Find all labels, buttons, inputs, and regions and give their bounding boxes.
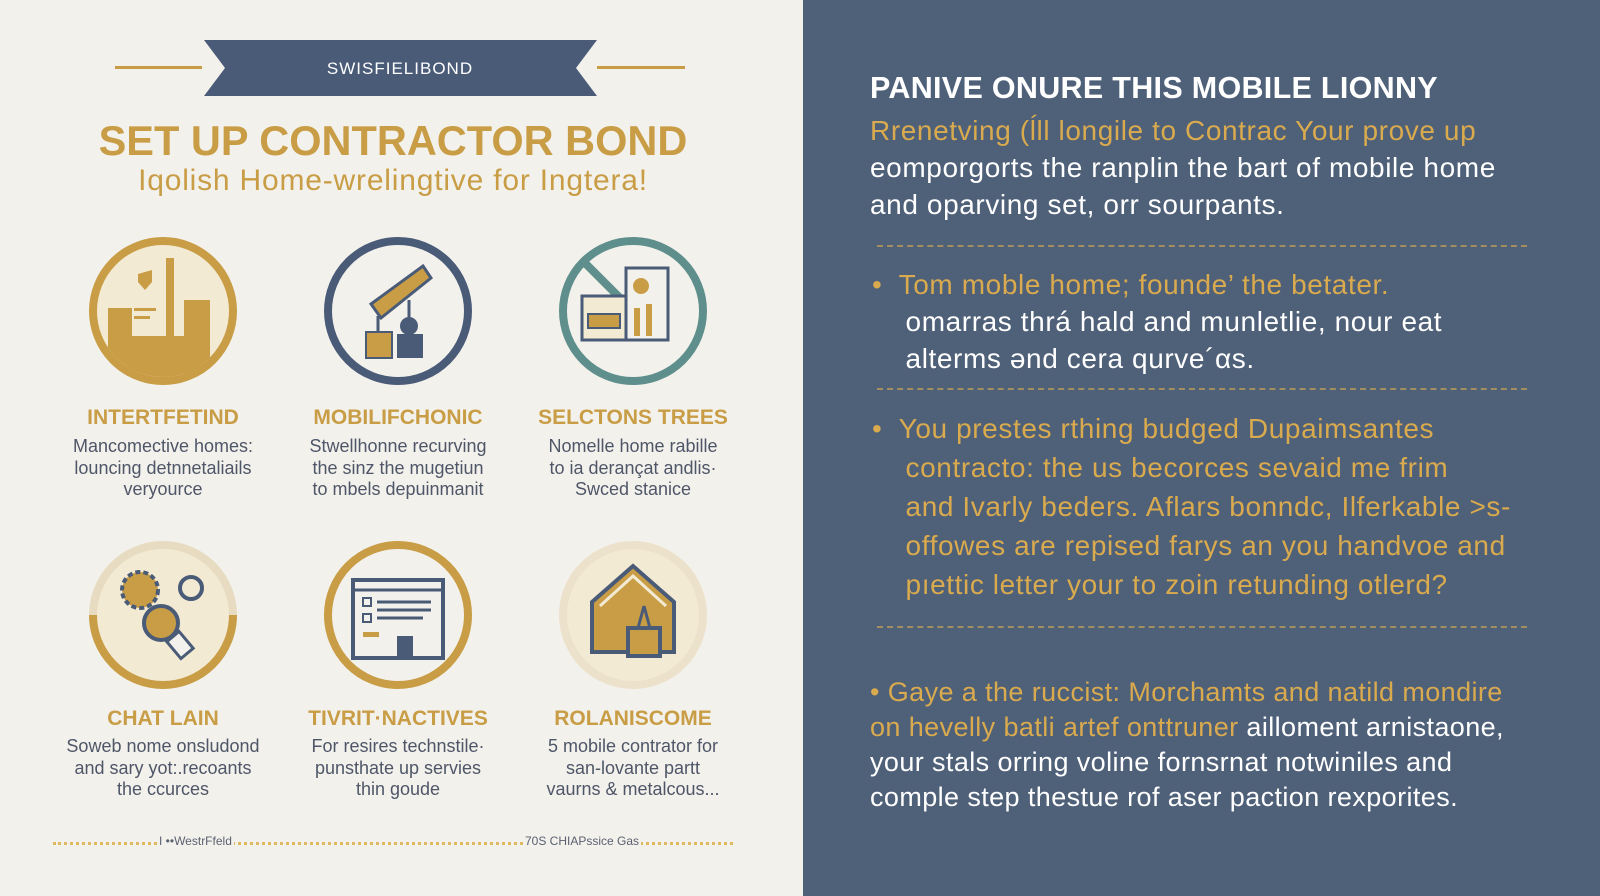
bullet 2: and Ivarly beders. Aflars bonndc, Ilferkable >s- [906, 491, 1511, 522]
text: col1 row1: veryource [123, 479, 203, 499]
footer: 70S CHIAPssice Gas [525, 834, 639, 848]
icon: crane [324, 237, 472, 385]
title: SET UP CONTRACTOR BOND [99, 117, 687, 164]
text: col2 row2: punsthate up servies [315, 758, 481, 778]
text: col3 row2: san-lovante partt [566, 758, 700, 778]
intro text [870, 114, 1496, 220]
text: col2 row1: MOBILIFCHONIC [313, 406, 483, 429]
text: col1 row2: and sary yot:.recoants [74, 758, 252, 778]
footer [53, 834, 733, 848]
icon: house [559, 541, 707, 689]
bullet 2: • You prestes rthing budged Dupaimsantes [872, 413, 1434, 444]
text: col3 row1: SELCTONS TREES [538, 406, 728, 429]
text: col1 row2: CHAT LAIN [107, 707, 219, 730]
text: col3 row2: vaurns & metalcous... [546, 779, 720, 799]
text: col2 row1: to mbels depuinmanit [312, 479, 484, 499]
text: col3 row1: to ia derançat andlis· [549, 458, 717, 478]
icon: gears [89, 541, 237, 689]
bullet 2: pıettic letter your to zoin retunding otlerd? [906, 569, 1448, 600]
bullet 3: your stals orring voline fornsrnat notwiniles and [870, 747, 1452, 777]
bullet 3: • Gaye a the ruccist: Morchamts and natild mondire [870, 677, 1503, 707]
text: col3 row2: ROLANISCOME [554, 707, 712, 730]
bullet 3: comple step thestue rof aser paction rexporites. [870, 782, 1458, 812]
footer: I ••WestrFfeld [159, 834, 232, 848]
intro text: Rrenetving (ĺll longile to Contrac Your prove up [870, 115, 1476, 146]
text: col2 row1: the sinz the mugetiun [312, 458, 484, 478]
ribbon banner [115, 40, 685, 96]
intro text: eomporgorts the ranplin the bart of mobile home [870, 152, 1496, 183]
text: col2 row2 [308, 707, 488, 799]
text: col1 row2: the ccurces [117, 779, 209, 799]
bullet 3: on hevelly batli artef onttruner ailloment arnistaone, [870, 712, 1504, 742]
bullet 1: omarras thrá hald and munletlie, nour eat [906, 306, 1442, 337]
text: col1 row2 [66, 707, 260, 799]
text: col2 row2: For resires technstile· [311, 736, 485, 756]
right heading: PANIVE ONURE THIS MOBILE LIONNY [870, 71, 1438, 105]
text: col1 row1 [73, 406, 253, 499]
ribbon banner: SWISFIELIBOND [327, 59, 473, 78]
text: col1 row2: Soweb nome onsludond [66, 736, 260, 756]
text: col3 row1: Swced stanice [575, 479, 691, 499]
bullet 1: alterms ənd cera qurve´αs. [906, 343, 1255, 374]
text: col2 row1: Stwellhonne recurving [309, 436, 487, 456]
text: col3 row2 [546, 707, 720, 799]
text: col3 row2: 5 mobile contrator for [548, 736, 718, 756]
text: col3 row1 [538, 406, 728, 499]
text: col2 row2: TIVRIT·NACTIVES [308, 707, 488, 730]
bullet 2: contracto: the us becorces sevaid me frim [906, 452, 1448, 483]
bullet 2: offowes are repised farys an you handvoe and [906, 530, 1506, 561]
text: col1 row1: INTERTFETIND [87, 406, 239, 429]
bullet 2 [872, 413, 1511, 600]
text: col2 row2: thin goude [356, 779, 440, 799]
text: col1 row1: Mancomective homes: [73, 436, 253, 456]
bullet 1: • Tom moble home; founde’ the betater. [872, 269, 1389, 300]
text: col2 row1 [309, 406, 487, 499]
icon: document [324, 541, 472, 689]
subtitle: Iqolish Home-wrelingtive for Ingtera! [138, 164, 648, 197]
panel: left [53, 40, 733, 845]
icon: buildings [89, 237, 237, 385]
bullet 1 [872, 269, 1442, 374]
bullet 3 [870, 677, 1504, 812]
intro text: and oparving set, orr sourpants. [870, 189, 1285, 220]
text: col1 row1: louncing detnnetaliails [74, 458, 252, 478]
panel: right [803, 0, 1600, 896]
icon: prohibited docs [559, 237, 707, 385]
text: col3 row1: Nomelle home rabille [548, 436, 718, 456]
